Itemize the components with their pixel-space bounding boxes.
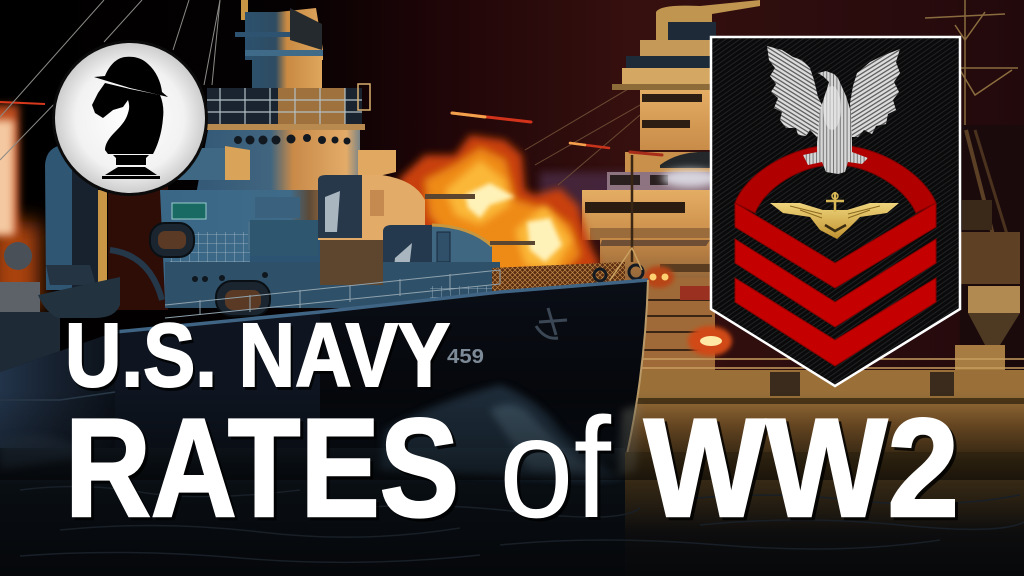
life raft upper bbox=[150, 223, 194, 257]
title shadow: WW2 bbox=[647, 392, 962, 549]
knight chess piece silhouette bbox=[92, 57, 168, 179]
title shadow: U.S. NAVY bbox=[67, 309, 452, 409]
battleship superstructure bbox=[582, 0, 760, 370]
tower railing platform bbox=[207, 84, 370, 130]
anchor emblem bbox=[536, 308, 567, 338]
bottom chevron bbox=[735, 278, 936, 366]
left sea bbox=[0, 448, 625, 576]
patch background with white border bbox=[711, 37, 960, 386]
round drum with portholes bbox=[165, 130, 396, 200]
background battleship bbox=[582, 0, 1024, 456]
second gun turret bbox=[383, 225, 535, 292]
main cannon fire bbox=[398, 135, 600, 290]
deck fence and tires bbox=[492, 155, 643, 296]
main tower bbox=[235, 0, 323, 92]
middle chevron bbox=[735, 239, 936, 327]
davit and lifeboat bbox=[0, 242, 162, 372]
red arc bbox=[735, 145, 936, 213]
title shadow: of bbox=[502, 392, 614, 551]
battleship gun flashes bbox=[644, 266, 732, 356]
forward gun turret bbox=[318, 175, 475, 240]
top chevron bbox=[735, 203, 936, 288]
hull railing bbox=[165, 270, 500, 318]
hull number 459: 459 bbox=[447, 346, 484, 368]
title shadow bbox=[67, 309, 962, 551]
life raft lower bbox=[216, 281, 270, 316]
title: of bbox=[499, 389, 611, 548]
title bbox=[65, 306, 959, 548]
silver eagle bbox=[767, 46, 900, 174]
battleship right tower and mast bbox=[925, 0, 1024, 371]
smoke stack bbox=[45, 146, 107, 290]
far-left gun fire bbox=[0, 102, 45, 312]
destroyer hull bbox=[0, 280, 648, 476]
right sea bbox=[622, 452, 1024, 576]
title shadow: RATES bbox=[68, 392, 462, 549]
battleship hull and deck bbox=[620, 359, 1024, 456]
bow wave bbox=[0, 385, 640, 480]
gold aviator wings bbox=[770, 192, 899, 239]
destroyer ship bbox=[0, 0, 648, 476]
title: U.S. NAVY bbox=[65, 306, 450, 406]
knight logo badge bbox=[52, 40, 208, 196]
rigging lines bbox=[0, 0, 640, 185]
lower deckhouse bbox=[160, 190, 320, 300]
sea ripples bbox=[20, 486, 1024, 562]
lower scene shading bbox=[0, 390, 1024, 480]
rating badge patch bbox=[711, 37, 960, 386]
tracer shells bbox=[452, 113, 662, 155]
title: RATES bbox=[65, 389, 459, 546]
title: WW2 bbox=[644, 389, 959, 546]
mid deck blocks bbox=[165, 220, 500, 308]
